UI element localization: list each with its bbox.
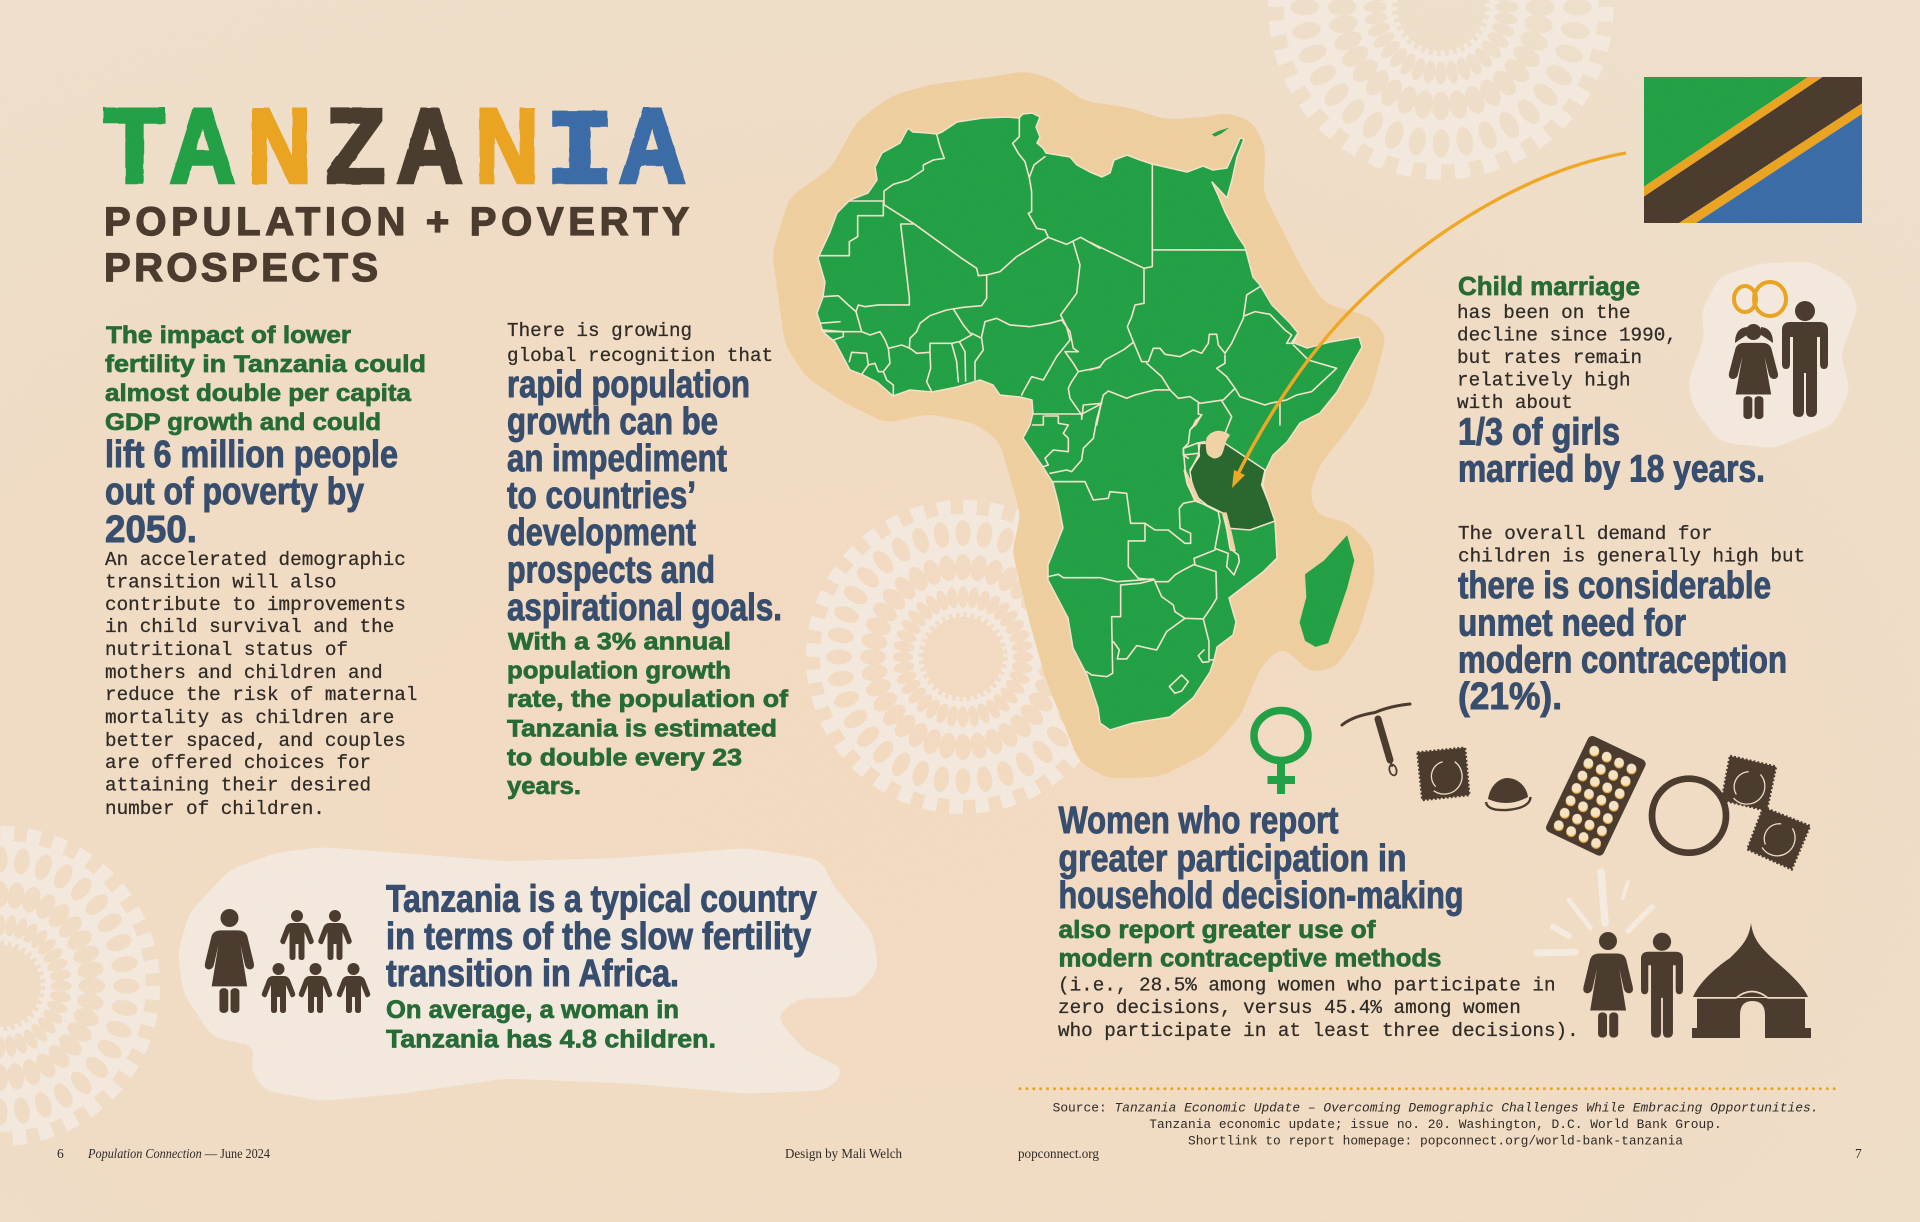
text block: rapid population growth: Tanzania is estimated <box>507 716 777 742</box>
blob behind figures <box>1688 262 1858 448</box>
text block: household decision-making <box>1058 800 1579 1042</box>
title: T <box>104 88 164 205</box>
text block: household decision-making: household decision-making <box>1058 875 1464 917</box>
footer: popconnect.org <box>1018 1146 1099 1161</box>
callout text: Tanzania is a typical country <box>386 878 817 920</box>
text block: lower fertility impact: contribute to improvements <box>105 594 406 616</box>
source note: Source: Tanzania Economic Update – Overcoming Demographic Challenges While Embracing Opportunities. <box>1053 1100 1818 1116</box>
text block: lower fertility impact: fertility in Tanzania could <box>105 351 426 378</box>
text block: lower fertility impact: better spaced, and couples <box>105 730 406 752</box>
icon: condom packet 2 <box>1722 756 1776 811</box>
dotted divider <box>1020 1087 1840 1090</box>
text block: household decision-making: who participate in at least three decisions). <box>1058 1020 1579 1042</box>
Madagascar <box>1300 535 1354 647</box>
text block: rapid population growth <box>507 320 789 800</box>
child marriage text: decline since 1990, <box>1457 324 1677 346</box>
country borders: north-east <box>1082 164 1337 425</box>
callout text: transition in Africa. <box>386 953 679 995</box>
callout text: Tanzania has 4.8 children. <box>386 1026 716 1054</box>
text block: unmet need: modern contraception <box>1458 640 1787 682</box>
callout blob <box>178 847 878 1101</box>
decorative mandala: left <box>0 808 178 1164</box>
title: N <box>476 88 538 205</box>
country borders: Southern Africa <box>1048 448 1239 693</box>
icon: wedding rings <box>1734 282 1786 316</box>
map halo <box>773 71 1386 779</box>
source note <box>1053 1100 1818 1148</box>
text block: rapid population growth: aspirational goals. <box>507 587 782 629</box>
child marriage text: with about <box>1457 392 1573 414</box>
child marriage text: but rates remain <box>1457 347 1642 369</box>
text block: lower fertility impact: transition will also <box>105 572 336 594</box>
rays <box>1537 872 1652 953</box>
subtitle <box>104 200 689 290</box>
text block: unmet need: there is considerable <box>1458 565 1771 607</box>
text block: unmet need: unmet need for <box>1458 602 1686 644</box>
text block: rapid population growth: With a 3% annual <box>508 628 731 656</box>
text block: rapid population growth: an impediment <box>507 438 727 480</box>
Cyprus <box>1212 128 1229 137</box>
text block: lower fertility impact: lift 6 million people <box>105 434 398 476</box>
text block: lower fertility impact: An accelerated demographic <box>105 549 406 571</box>
text block: rapid population growth: There is growing <box>507 320 692 342</box>
arrow from flag to Tanzania <box>1232 153 1626 488</box>
text block: lower fertility impact: mothers and children and <box>105 662 383 684</box>
decorative mandala: top right <box>1248 0 1634 200</box>
country borders: north-west <box>818 118 1100 415</box>
title: A <box>397 88 462 205</box>
subtitle: POPULATION + POVERTY <box>104 200 689 244</box>
text block: lower fertility impact: GDP growth and could <box>105 409 381 436</box>
child marriage text: relatively high <box>1457 370 1631 392</box>
country borders: Great Lakes <box>1183 401 1232 470</box>
panel: child marriage <box>1457 262 1858 490</box>
callout text: On average, a woman in <box>386 996 679 1024</box>
text block: household decision-making: also report greater use of <box>1058 916 1376 944</box>
callout text <box>386 878 817 1054</box>
country borders: Central Africa <box>1033 402 1102 482</box>
text block: lower fertility impact: almost double per capita <box>105 380 412 407</box>
text block: lower fertility impact: The impact of lower <box>106 322 351 349</box>
text block: rapid population growth: rate, the population of <box>507 686 789 713</box>
title: A <box>170 88 235 205</box>
text block: household decision-making: modern contraceptive methods <box>1058 944 1442 972</box>
icon: woman with children <box>205 909 370 1013</box>
footer: Design by Mali Welch <box>785 1146 902 1161</box>
callout text: in terms of the slow fertility <box>386 916 811 958</box>
panel: typical country callout <box>178 847 878 1101</box>
icon: IUD <box>1342 704 1410 776</box>
text block: rapid population growth: rapid population <box>507 364 750 406</box>
text block: unmet need: (21%). <box>1458 676 1562 718</box>
title: N <box>248 88 311 205</box>
text block: household decision-making: (i.e., 28.5% among women who participate in <box>1058 974 1556 996</box>
text block: lower fertility impact: in child survival and the <box>105 616 394 638</box>
text block: lower fertility impact: out of poverty by <box>105 471 364 513</box>
title: A <box>619 88 686 205</box>
title: I <box>546 95 614 214</box>
text block: lower fertility impact: are offered choices for <box>105 752 371 774</box>
footer: Population Connection — June 2024 <box>87 1146 270 1161</box>
icon: girl and man <box>1729 301 1828 419</box>
text block: lower fertility impact: number of children. <box>105 798 325 820</box>
text block: lower fertility impact: reduce the risk of maternal <box>105 684 417 706</box>
child marriage text: married by 18 years. <box>1458 448 1765 490</box>
text block: unmet need: The overall demand for <box>1458 523 1713 545</box>
child marriage text: 1/3 of girls <box>1458 412 1620 454</box>
icon: diaphragm <box>1486 778 1530 810</box>
text block: lower fertility impact: attaining their desired <box>105 774 371 796</box>
text block: unmet need: children is generally high but <box>1458 546 1805 568</box>
icon: flag of Tanzania <box>1644 77 1862 223</box>
text block: rapid population growth: prospects and <box>507 550 715 592</box>
icon: birth control pill pack <box>1544 734 1647 857</box>
icon: condom packet 1 <box>1418 748 1469 800</box>
continent shape <box>817 113 1362 730</box>
child marriage text: Child marriage <box>1458 271 1640 301</box>
map of Africa <box>773 71 1386 779</box>
Tanzania highlighted <box>1190 443 1275 530</box>
text block: rapid population growth: years. <box>507 773 581 800</box>
text block: rapid population growth: population growth <box>507 658 731 684</box>
decorative mandala: centre <box>788 482 1138 832</box>
title <box>104 88 686 214</box>
child marriage text <box>1457 271 1765 490</box>
text block: household decision-making: greater participation in <box>1058 838 1406 880</box>
text block: rapid population growth: development <box>507 512 696 554</box>
text block: unmet need <box>1458 523 1805 718</box>
lakes <box>1183 413 1236 551</box>
footer: 7 <box>1855 1146 1862 1161</box>
icon: female symbol <box>1254 710 1308 794</box>
text block: rapid population growth: global recognition that <box>507 345 773 367</box>
icon: vaginal ring <box>1652 779 1726 853</box>
text block: lower fertility impact: 2050. <box>105 509 197 551</box>
text block: lower fertility impact <box>105 322 426 820</box>
text block: rapid population growth: to double every 23 <box>507 744 742 772</box>
icon: condom packet 3 <box>1747 807 1810 869</box>
text block: household decision-making: Women who report <box>1058 800 1339 842</box>
text block: rapid population growth: to countries’ <box>507 475 696 517</box>
child marriage text: has been on the <box>1457 302 1631 324</box>
hut <box>1692 923 1811 1038</box>
text block: rapid population growth: growth can be <box>507 401 718 443</box>
text block: lower fertility impact: nutritional status of <box>105 639 348 661</box>
footer <box>57 1146 1862 1161</box>
source note: Shortlink to report homepage: popconnect.org/world-bank-tanzania <box>1188 1134 1683 1148</box>
text block: lower fertility impact: mortality as children are <box>105 707 394 729</box>
title: Z <box>326 88 385 205</box>
icon: couple and hut with rays <box>1537 872 1811 1038</box>
subtitle: PROSPECTS <box>104 246 378 290</box>
couple <box>1583 932 1683 1038</box>
footer: 6 <box>57 1146 64 1161</box>
source note: Tanzania economic update; issue no. 20. Washington, D.C. World Bank Group. <box>1149 1117 1722 1132</box>
text block: household decision-making: zero decisions, versus 45.4% among women <box>1058 997 1521 1019</box>
